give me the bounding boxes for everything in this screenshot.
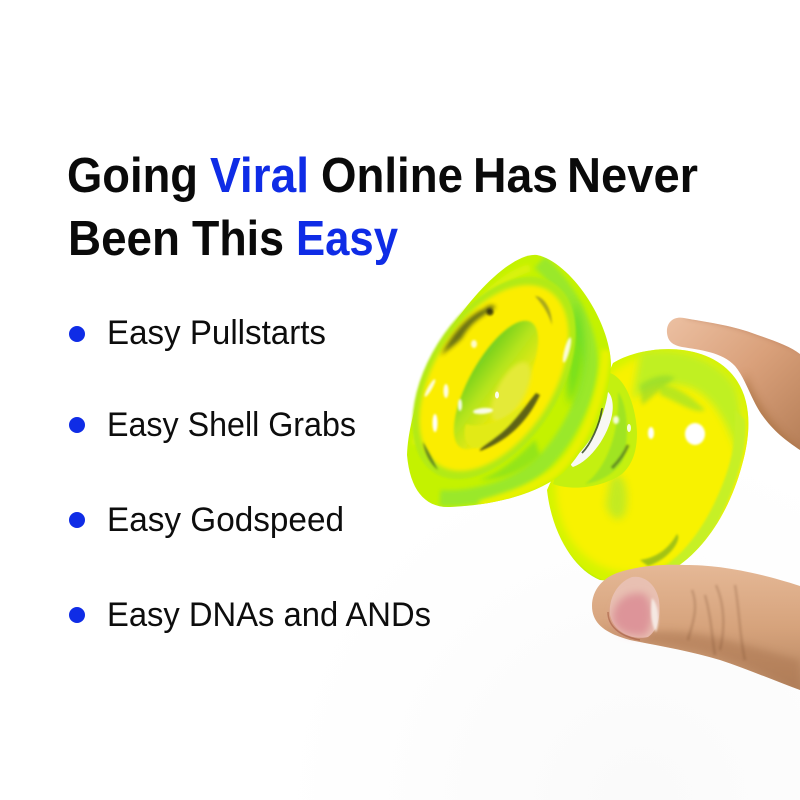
bullet: Easy Shell Grabs: Easy Shell Grabs (107, 406, 356, 444)
rim bands (440, 262, 590, 498)
title: Online (321, 149, 463, 203)
title: Never (567, 149, 698, 203)
title: This (192, 212, 284, 266)
title: Going (67, 149, 198, 203)
yellow inner face (379, 248, 609, 508)
top finger (666, 318, 800, 450)
title: Viral (210, 149, 309, 203)
thumbnail (608, 577, 660, 640)
thumb (592, 565, 800, 692)
title (67, 149, 698, 266)
bullet: Easy Pullstarts: Easy Pullstarts (107, 314, 326, 352)
right yo-yo half (547, 349, 748, 580)
photo: hand holding neon yellow yo-yo (379, 248, 800, 692)
title: Been (68, 212, 180, 266)
axle hub and white bearing (553, 373, 637, 488)
title: Easy (296, 212, 398, 266)
left yo-yo half (407, 254, 611, 507)
bullet list (69, 314, 431, 634)
title: Has (473, 149, 558, 203)
bullet: Easy DNAs and ANDs: Easy DNAs and ANDs (107, 596, 431, 634)
highlights (423, 337, 573, 432)
bullet: Easy Godspeed: Easy Godspeed (107, 501, 344, 539)
dark reflections (423, 296, 552, 470)
inner well of the face (437, 309, 555, 461)
